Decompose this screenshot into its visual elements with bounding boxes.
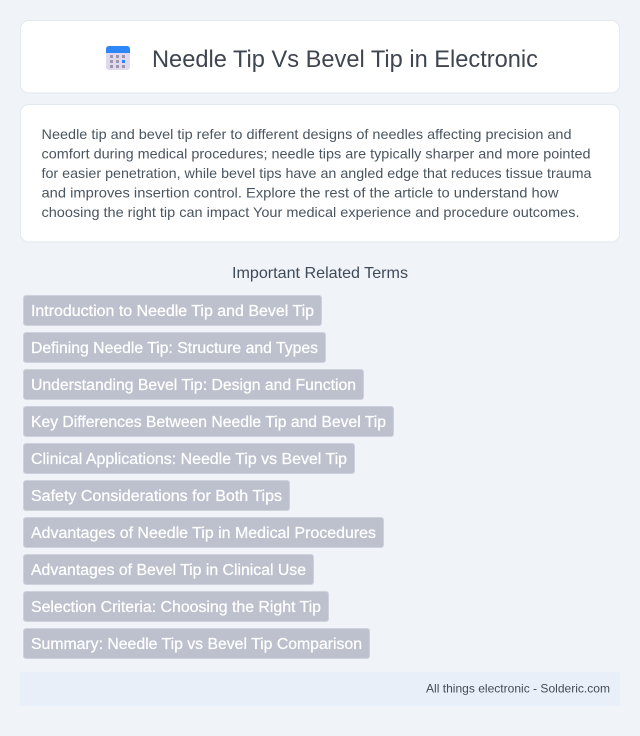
icon: calendar grid bbox=[106, 46, 130, 70]
chip: advantages of needle tip: Advantages of Needle Tip in Medical Procedures bbox=[31, 525, 376, 542]
chip: clinical applications bbox=[24, 444, 354, 474]
chip: selection criteria bbox=[24, 592, 328, 622]
text block: paragraph: and improves insertion control. Explore the rest of the article to understand how bbox=[42, 186, 559, 200]
chip: defining needle tip bbox=[24, 332, 326, 362]
text block: paragraph: for easier penetration, while bevel tips have an angled edge that reduces tissue trauma bbox=[42, 166, 592, 181]
chip: clinical applications: Clinical Applications: Needle Tip vs Bevel Tip bbox=[31, 451, 347, 468]
title: Needle Tip Vs Bevel Tip in Electronic bbox=[152, 46, 538, 73]
text block: paragraph: comfort during medical procedures; needle tips are typically sharper and more pointed bbox=[42, 146, 590, 162]
chip: understanding bevel tip bbox=[24, 370, 364, 400]
panel: intro paragraph bbox=[20, 104, 620, 242]
chip: advantages of needle tip bbox=[24, 518, 384, 548]
list of related term chips bbox=[24, 296, 394, 658]
panel: title card bbox=[20, 20, 620, 93]
chip: summary bbox=[24, 628, 370, 658]
chip: summary: Summary: Needle Tip vs Bevel Tip Comparison bbox=[31, 636, 362, 653]
footer bbox=[20, 672, 620, 706]
text block: paragraph: choosing the right tip can impact Your medical experience and procedure outcomes. bbox=[42, 205, 580, 220]
chip: key differences bbox=[24, 406, 394, 436]
chip: defining needle tip: Defining Needle Tip: Structure and Types bbox=[31, 340, 318, 357]
chip: selection criteria: Selection Criteria: Choosing the Right Tip bbox=[31, 599, 321, 616]
chip: introduction: Introduction to Needle Tip and Bevel Tip bbox=[31, 303, 314, 320]
chip: advantages of bevel tip bbox=[24, 554, 314, 584]
chip: key differences: Key Differences Between Needle Tip and Bevel Tip bbox=[31, 414, 386, 431]
footer: All things electronic - Solderic.com bbox=[426, 682, 610, 696]
text block: paragraph bbox=[42, 127, 592, 220]
text block: paragraph: Needle tip and bevel tip refer to different designs of needles affecting precision and bbox=[42, 127, 572, 142]
chip: safety considerations: Safety Considerations for Both Tips bbox=[31, 488, 282, 505]
heading: important related terms: Important Related Terms bbox=[232, 265, 408, 282]
chip: understanding bevel tip: Understanding Bevel Tip: Design and Function bbox=[31, 377, 356, 394]
chip: advantages of bevel tip: Advantages of Bevel Tip in Clinical Use bbox=[31, 562, 306, 579]
chip: introduction bbox=[24, 296, 322, 326]
chip: safety considerations bbox=[24, 480, 290, 510]
